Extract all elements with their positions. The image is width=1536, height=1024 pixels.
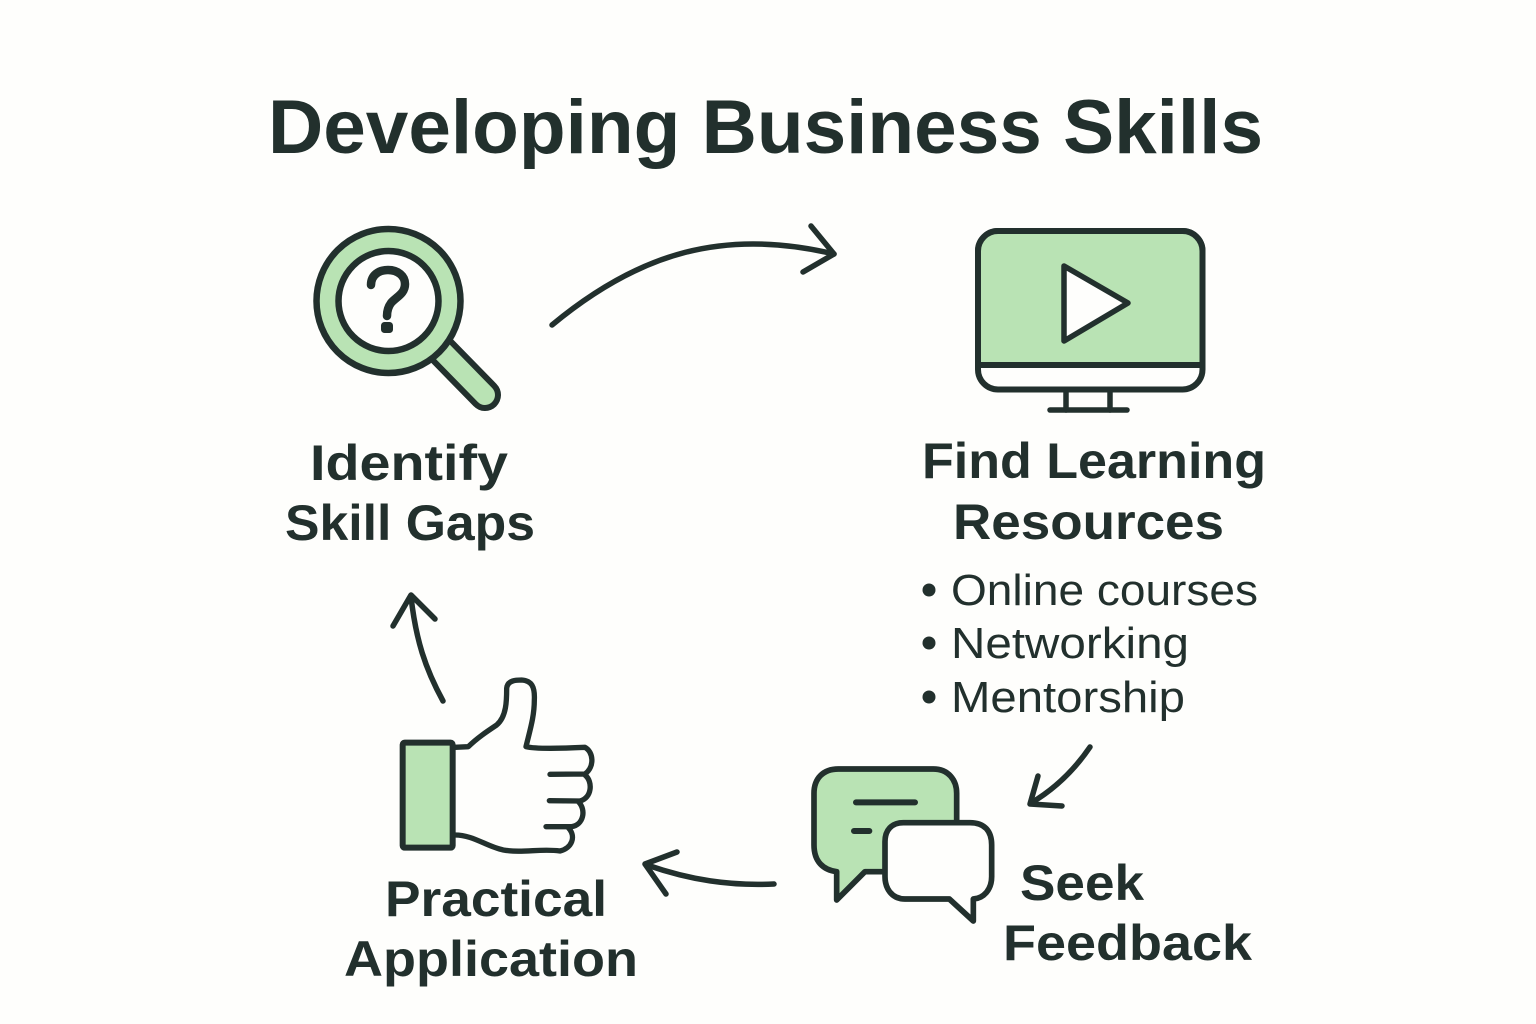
icon: monitor with play button	[978, 231, 1202, 410]
heading: identify skill gaps	[285, 435, 535, 551]
arrow: feedback to application	[645, 852, 774, 894]
heading: identify skill gaps: Skill Gaps	[285, 495, 535, 551]
heading: find learning resources	[922, 433, 1266, 550]
heading: practical application: Practical	[385, 871, 607, 927]
heading: practical application	[344, 871, 638, 987]
list: learning resources: Online courses	[951, 566, 1258, 615]
heading: seek feedback: Feedback	[1003, 915, 1252, 971]
arrow: resources to feedback	[1030, 747, 1090, 806]
list: learning resources: Mentorship	[951, 673, 1185, 722]
heading: seek feedback	[1003, 855, 1252, 971]
title: Developing Business Skills	[268, 85, 1263, 170]
heading: find learning resources: Find Learning	[922, 433, 1266, 489]
heading: seek feedback: Seek	[1020, 855, 1144, 911]
arrow: identify to resources	[552, 226, 834, 325]
heading: identify skill gaps: Identify	[310, 435, 508, 491]
list: learning resources: Networking	[951, 619, 1189, 668]
heading: practical application: Application	[344, 931, 638, 987]
icon: magnifying glass with question mark	[316, 229, 485, 395]
heading: find learning resources: Resources	[953, 494, 1224, 550]
list: learning resources	[922, 566, 1258, 722]
icon: speech bubbles	[814, 769, 992, 921]
icon: thumbs up	[403, 680, 592, 851]
arrow: application to identify	[393, 595, 443, 701]
